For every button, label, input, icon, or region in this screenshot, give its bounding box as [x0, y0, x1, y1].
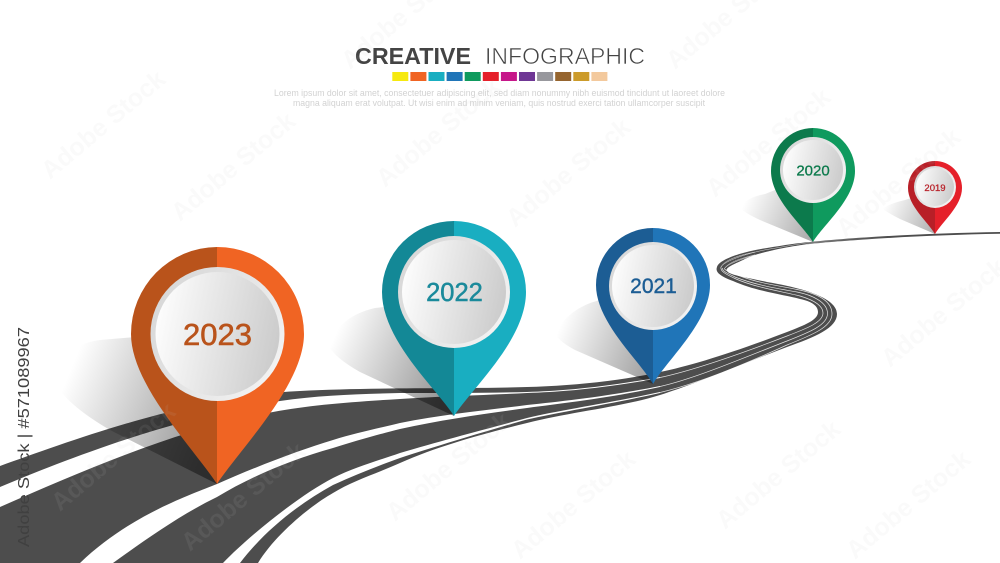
stock id label: Adobe Stock | #571089967	[16, 327, 33, 547]
title	[355, 43, 645, 69]
title: CREATIVE	[355, 43, 471, 69]
stock watermark: Adobe Stock	[36, 65, 171, 185]
pin: 2023: 2023	[183, 317, 252, 352]
stock watermark: Adobe Stock	[701, 83, 836, 203]
stock watermark: Adobe Stock	[831, 123, 966, 243]
description text: magna aliquam erat volutpat. Ut wisi enim ad minim veniam, quis nostrud exerci tation ullamcorper suscipit	[293, 98, 705, 108]
colour swatches	[392, 72, 607, 81]
stock watermark: Adobe Stock	[711, 415, 846, 535]
pin: 2019: 2019	[924, 183, 946, 194]
pin: 2021: 2021	[630, 275, 677, 298]
stock watermark: Adobe Stock	[501, 113, 636, 233]
winding road	[0, 232, 1000, 563]
pin: 2022	[382, 221, 526, 416]
stock watermark: Adobe Stock	[371, 73, 506, 193]
pin: 2022: 2022	[426, 279, 483, 307]
stock watermark: Adobe Stock	[176, 437, 311, 557]
pin: 2021	[596, 228, 710, 384]
pin: 2020	[771, 128, 855, 242]
description text: Lorem ipsum dolor sit amet, consectetuer adipiscing elit, sed diam nonummy nibh euismod tincidunt ut laoreet dolore	[274, 88, 725, 98]
title: INFOGRAPHIC	[485, 43, 645, 69]
stock watermark: Adobe Stock	[46, 397, 181, 517]
pin: 2023	[131, 247, 304, 484]
pin: 2020: 2020	[796, 163, 830, 180]
stock watermark: Adobe Stock	[841, 445, 976, 563]
stock watermark: Adobe Stock	[381, 407, 516, 527]
stock watermark: Adobe Stock	[506, 445, 641, 563]
description text	[274, 88, 725, 108]
stock watermark: Adobe Stock	[166, 107, 301, 227]
pin shadows	[53, 175, 935, 484]
pin: 2019	[908, 161, 962, 234]
